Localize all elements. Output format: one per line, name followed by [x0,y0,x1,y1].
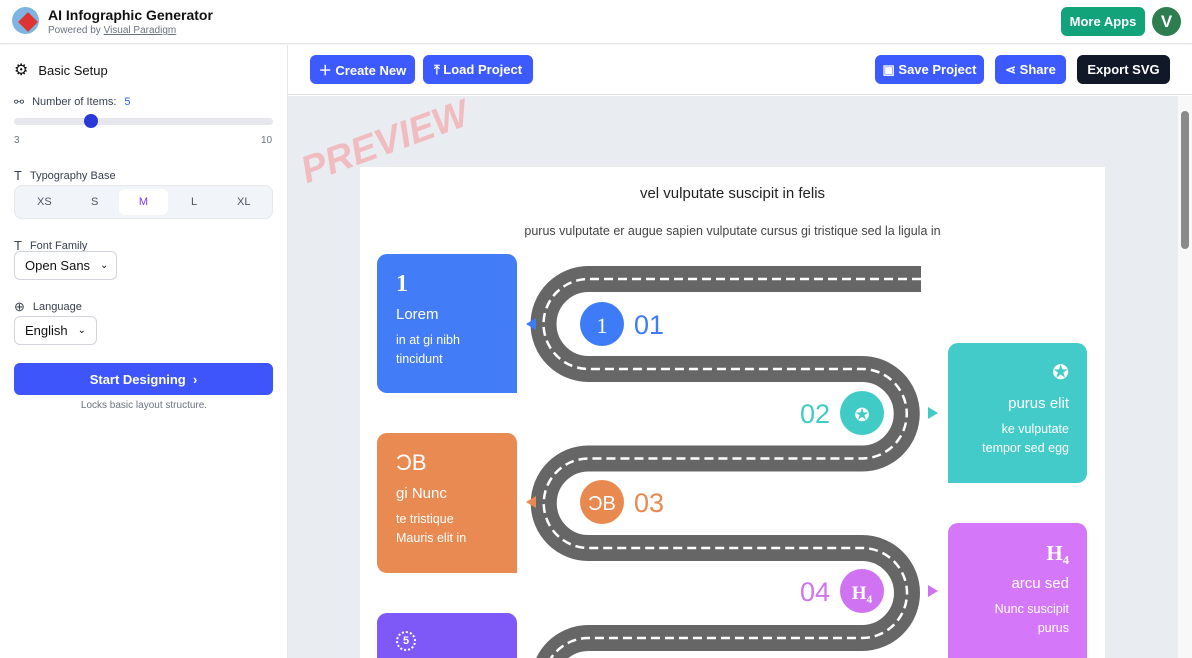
icon: logo [12,7,39,34]
toolbar: ⋖ Share [1005,62,1056,76]
infographic canvas [360,167,1105,658]
size selector: XS [37,196,52,208]
sidebar: ⌄ [78,325,86,336]
step 02 marker: 02 [800,399,830,429]
size selector: XL [237,196,250,208]
font family [14,238,88,253]
sidebar: English [25,323,68,338]
sidebar [0,45,288,658]
subtitle: Powered by Visual Paradigm [48,25,176,36]
card 2: ke vulputate [1002,422,1069,436]
heading: basic setup: ⚙ [14,62,28,79]
road chart [526,266,938,658]
typography label: T [14,168,22,183]
heading: basic setup [14,62,108,79]
start designing button [14,363,273,395]
card 5: 5 [403,635,409,647]
card 3: ϽB [396,450,427,475]
step 04 marker: 04 [800,577,830,607]
card 1 [377,254,517,393]
more apps button [1061,7,1145,36]
pointer arrows [526,318,938,597]
card 1: tincidunt [396,352,443,366]
more apps button: More Apps [1070,14,1136,29]
size selector: L [191,196,197,208]
sidebar: 10 [261,135,272,146]
card 3: te tristique [396,512,454,526]
card 4: H₄ [1046,541,1069,565]
size selector [14,185,273,219]
card 1: 1 [396,271,408,297]
toolbar: ▣ Save Project [883,62,976,76]
card 3 [377,433,517,573]
toolbar [288,45,1192,95]
typography label: Typography Base [30,170,116,182]
sidebar: Locks basic layout structure. [81,400,207,411]
card 1: in at gi nibh [396,333,460,347]
card 1: Lorem [396,306,439,323]
card 3: gi Nunc [396,485,447,502]
card 4: Nunc suscipit [995,602,1069,616]
subtitle: purus vulputate er augue sapien vulputate cursus gi tristique sed la ligula in [524,224,941,238]
number of items label: 5 [124,96,131,108]
card 4: purus [1038,621,1069,635]
card 3: Mauris elit in [396,531,466,545]
toolbar: ＋ Create New [319,63,406,78]
step 03 marker: 03 [634,488,664,518]
number of items label [14,95,131,109]
step 03 marker: ϽB [588,493,616,515]
start designing button: Start Designing › [90,372,197,386]
language [14,299,82,314]
step 01 marker [580,302,664,346]
step 01 marker: 01 [634,310,664,340]
typography label [14,168,116,183]
size selector: S [91,196,98,208]
preview watermark: PREVIEW [295,93,474,192]
card 2 [948,343,1087,483]
card 4: arcu sed [1011,575,1069,592]
toolbar: Export SVG [1087,62,1160,77]
number of items label: ⚯ [14,95,24,109]
sidebar: Open Sans [25,258,90,273]
card 4 [948,523,1087,658]
scrollbar [1178,96,1192,658]
card 5 [377,613,517,658]
number of items label: Number of Items: [32,96,116,108]
step 04 marker [800,569,884,613]
language: Language [33,301,82,313]
font family: T [14,238,22,253]
sidebar: ⌄ [100,260,108,271]
card 2: tempor sed egg [982,441,1069,455]
slider [14,118,273,125]
heading: basic setup: Basic Setup [38,62,108,78]
toolbar: ⤒ Load Project [434,62,522,76]
sidebar: 3 [14,135,20,146]
language: ⊕ [14,299,25,314]
font family: Font Family [30,240,87,252]
card 2: ✪ [1052,362,1069,384]
canvas background [288,96,1178,658]
step 01 marker: 1 [596,313,608,338]
card 2: purus elit [1008,395,1069,412]
avatar: V [1161,12,1172,30]
top header [0,0,1192,44]
step 03 marker [580,480,664,524]
step 02 marker [800,391,884,435]
app title: AI Infographic Generator [48,7,213,23]
step 04 marker: H₄ [852,583,873,604]
title: vel vulputate suscipit in felis [640,185,825,202]
size selector: M [139,196,148,208]
avatar [1152,7,1181,36]
step 02 marker: ✪ [854,405,870,425]
